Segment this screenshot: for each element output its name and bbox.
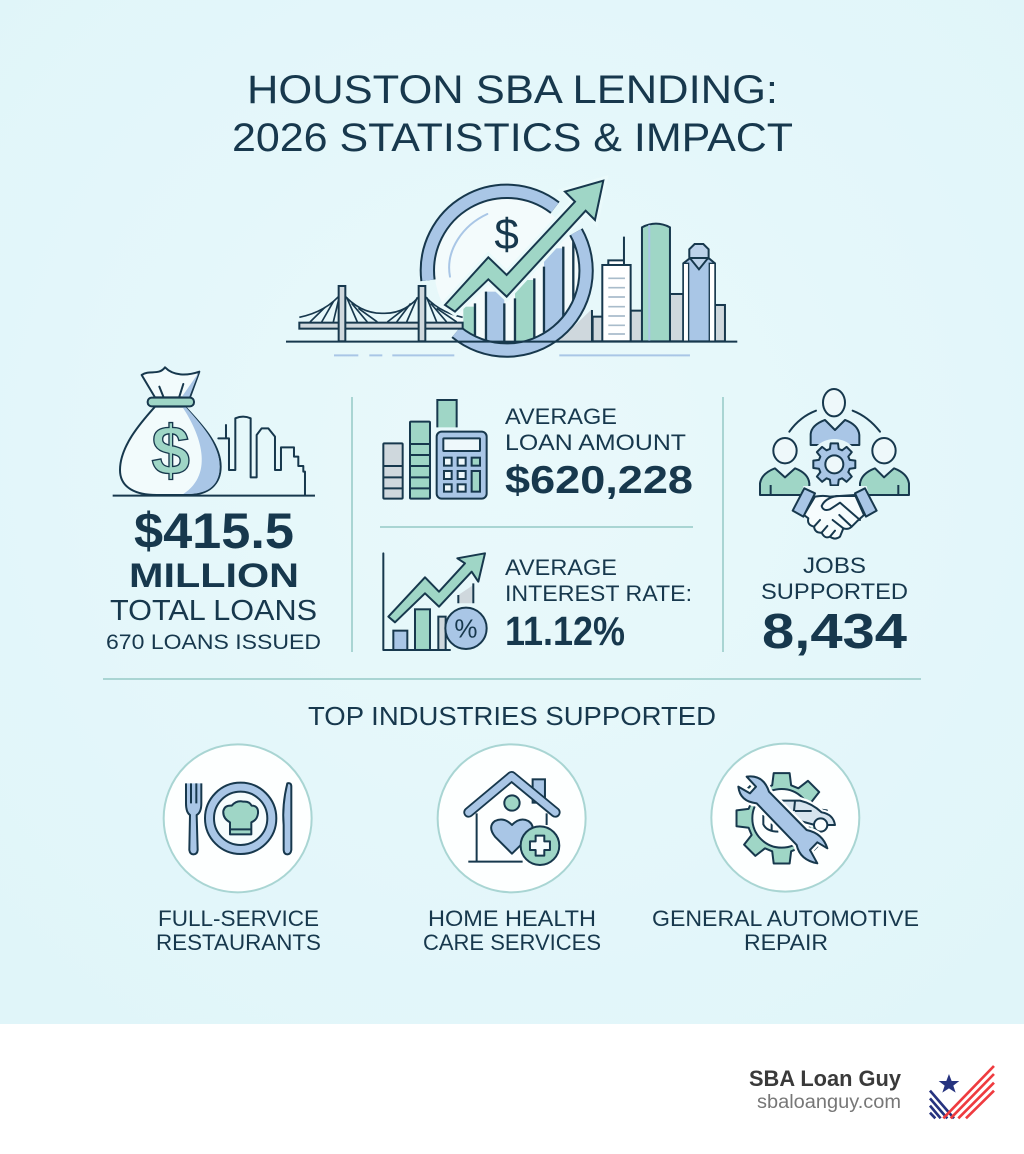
panel: jobs supported: SUPPORTED <box>761 579 908 604</box>
handshake <box>797 486 873 545</box>
label: FULL-SERVICE <box>158 906 319 931</box>
ground line <box>286 339 737 345</box>
label and value: JOBS <box>803 553 866 578</box>
skyline <box>558 224 725 341</box>
panel: home health care: CARE SERVICES <box>423 930 601 955</box>
footer brand text: sbaloanguy.com <box>757 1092 901 1113</box>
icon: plate, fork and knife <box>164 744 312 892</box>
panel: average interest rate: INTEREST RATE: <box>505 581 692 606</box>
panel: average interest rate: 11.12% <box>505 608 625 654</box>
label: HOME HEALTH <box>428 906 596 931</box>
label and value: AVERAGE <box>505 555 617 580</box>
panel: total loans <box>106 367 321 654</box>
coin with bars <box>435 199 579 343</box>
panel: average loan amount: LOAN AMOUNT <box>505 430 686 455</box>
icon: wrench, gear and car <box>711 744 859 892</box>
panel: jobs supported: 8,434 <box>762 605 907 659</box>
panel: automotive repair: REPAIR <box>744 930 828 955</box>
panel: home health care <box>423 744 601 955</box>
icon: team, gear and handshake <box>760 389 909 545</box>
title <box>232 68 793 160</box>
panel: jobs supported <box>760 389 909 659</box>
footer brand text: SBA Loan Guy <box>749 1066 902 1091</box>
panel: average loan amount: $620,228 <box>505 459 693 502</box>
panel: restaurants <box>156 744 321 955</box>
total loans figure: $415.5 <box>134 503 294 559</box>
divider lines <box>103 397 921 679</box>
icon: money bag and skyline: $ <box>151 412 190 490</box>
title: 2026 STATISTICS & IMPACT <box>232 116 793 160</box>
bridge <box>299 286 463 341</box>
icon: house, heart and plus <box>438 744 586 892</box>
loans issued: 670 LOANS ISSUED <box>106 631 321 654</box>
icon: chart with percent badge: % <box>454 614 478 644</box>
gear <box>809 439 860 490</box>
panel: average loan amount <box>383 400 693 502</box>
dollar sign: $ <box>494 210 519 259</box>
label and value: AVERAGE <box>505 404 617 429</box>
growth arrow <box>445 181 603 312</box>
heading: top industries: TOP INDUSTRIES SUPPORTED <box>308 701 716 731</box>
total loans label: TOTAL LOANS <box>110 595 317 627</box>
icon: bars and calculator <box>383 400 487 499</box>
icon: money bag and skyline <box>113 367 315 496</box>
title: HOUSTON SBA LENDING: <box>247 68 778 112</box>
panel: total loans: MILLION <box>129 557 299 595</box>
footer logo: star and stripes <box>930 1066 994 1118</box>
footer brand text <box>749 1066 902 1113</box>
label: GENERAL AUTOMOTIVE <box>652 906 919 931</box>
panel: restaurants: RESTAURANTS <box>156 930 321 955</box>
hero illustration: bridge, coin, growth arrow, skyline <box>286 181 737 355</box>
panel: average interest rate <box>383 553 692 654</box>
icon: chart with percent badge <box>383 553 487 650</box>
panel: automotive repair <box>652 744 919 955</box>
